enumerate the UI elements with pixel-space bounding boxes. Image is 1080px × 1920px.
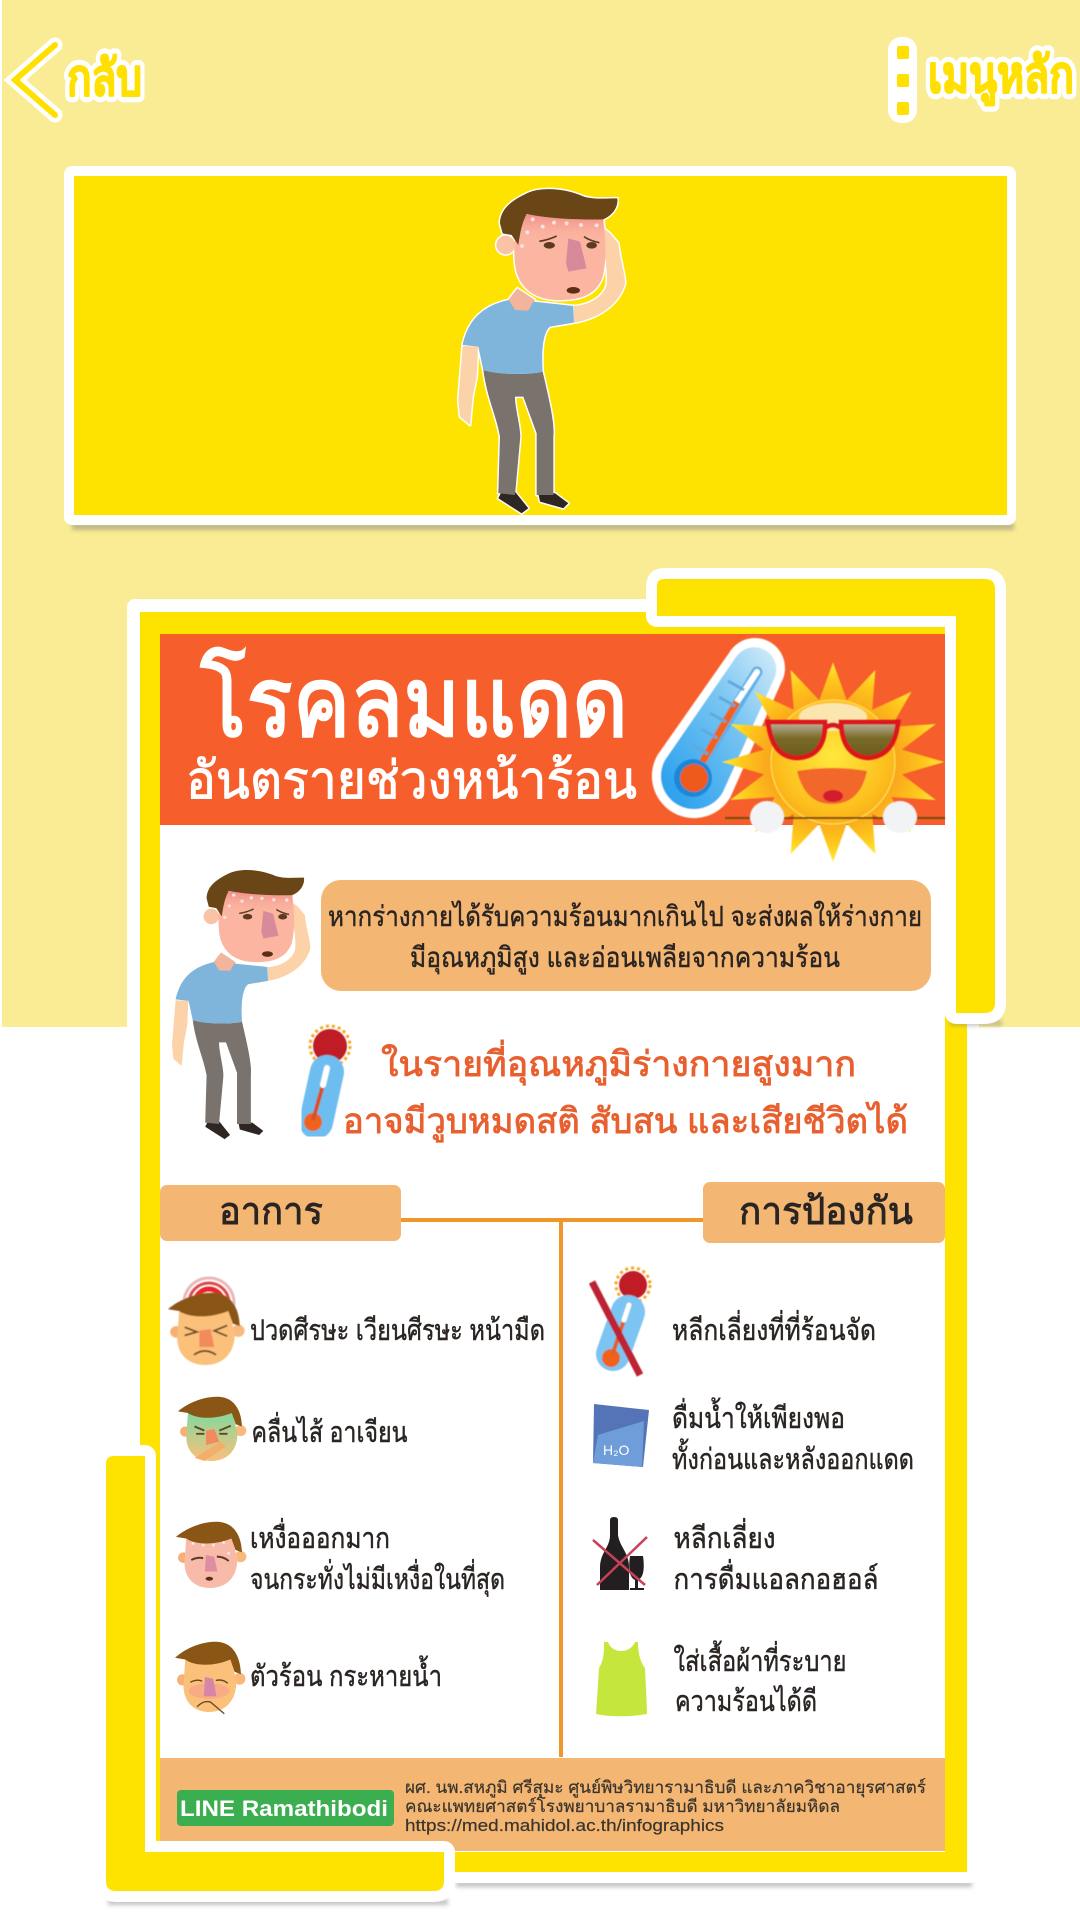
prevention text line 2: การดื่มแอลกอฮอล์ (674, 1559, 878, 1596)
warning line 2: อาจมีวูบหมดสติ สับสน และเสียชีวิตได้ (343, 1101, 908, 1142)
icon: sweating man (458, 189, 625, 513)
callout text line 2: มีอุณหภูมิสูง และอ่อนเพลียจากความร้อน (410, 942, 840, 975)
icon: tank top (596, 1642, 647, 1716)
prevention text: หลีกเลี่ยงที่ที่ร้อนจัด (672, 1310, 876, 1347)
panel: top illustration (64, 166, 1016, 525)
intro man illustration (172, 870, 310, 1139)
icon: back chevron (15, 45, 55, 115)
symptom text: คลื่นไส้ อาเจียน (252, 1412, 408, 1449)
subtitle: อันตรายช่วงหน้าร้อน (186, 752, 637, 810)
source credits: ผศ. นพ.สหภูมิ ศรีสุมะ ศูนย์พิษวิทยารามาธิบดี และภาควิชาอายุรศาสตร์ (405, 1778, 926, 1798)
icon: menu dots (888, 37, 917, 123)
icon: sun with sunglasses (722, 662, 945, 862)
warning text (343, 1040, 908, 1142)
footer band (160, 1758, 945, 1851)
page background (2, 0, 1080, 1027)
prevention 3: avoid alcohol (593, 1517, 878, 1596)
connector lines between the two columns (401, 1220, 703, 1757)
main menu button (888, 37, 1074, 123)
prevention 1: avoid heat (592, 1268, 876, 1375)
prevention 4: light clothing (596, 1640, 846, 1718)
title: โรคลมแดด (200, 647, 628, 757)
icon: crossed-out bottle and glass (593, 1517, 647, 1590)
prevention text line 2: ความร้อนได้ดี (675, 1684, 817, 1718)
symptom text line 2: จนกระทั่งไม่มีเหงื่อในที่สุด (250, 1559, 505, 1597)
prevention 2: drink water (593, 1397, 914, 1476)
symptom text: ปวดศีรษะ เวียนศีรษะ หน้ามืด (250, 1315, 545, 1347)
source credits (405, 1778, 926, 1835)
heading: symptoms (160, 1185, 401, 1241)
icon: headache face (168, 1278, 245, 1365)
heading: symptoms: อาการ (219, 1191, 323, 1233)
corner bracket: top right (657, 579, 995, 1013)
prevention text line 1: ดื่มน้ำให้เพียงพอ (672, 1397, 845, 1435)
symptom 1: headache (168, 1278, 545, 1365)
LINE badge: LINE Ramathibodi (180, 1796, 388, 1821)
symptom 3: sweating (176, 1518, 505, 1597)
heading: prevention: การป้องกัน (739, 1191, 913, 1233)
icon: glass of water (593, 1404, 649, 1467)
icon: sweating face (176, 1522, 246, 1588)
symptom 4: fever (175, 1642, 442, 1714)
warning line 1: ในรายที่อุณหภูมิร่างกายสูงมาก (381, 1040, 856, 1085)
back button (15, 45, 142, 115)
label: back: กลับ (67, 50, 142, 106)
symptom text line 1: เหงื่อออกมาก (250, 1518, 390, 1555)
icon: small thermometer with sun (304, 1026, 350, 1131)
symptom text: ตัวร้อน กระหายน้ำ (250, 1655, 442, 1693)
icon: nauseous face (178, 1397, 246, 1461)
prevention text line 1: ใส่เสื้อผ้าที่ระบาย (674, 1640, 846, 1678)
heading: prevention (703, 1182, 945, 1243)
panel: infographic frame (127, 599, 979, 1883)
icon: crossed-out thermometer (592, 1268, 650, 1375)
prevention text line 2: ทั้งก่อนและหลังออกแดด (672, 1438, 914, 1476)
source credits: https://med.mahidol.ac.th/infographics (405, 1816, 724, 1835)
intro callout (321, 880, 931, 991)
callout text line 1: หากร่างกายได้รับความร้อนมากเกินไป จะส่งผลให้ร่างกาย (328, 900, 922, 932)
source credits: คณะแพทยศาสตร์โรงพยาบาลรามาธิบดี มหาวิทยาลัยมหิดล (405, 1796, 840, 1816)
label: back: กลับ (67, 50, 142, 106)
icon: feverish face (175, 1642, 245, 1714)
header banner (160, 634, 945, 862)
corner bracket: bottom left (106, 1456, 444, 1891)
icon: big thermometer (652, 638, 785, 818)
symptom 2: nausea (178, 1397, 408, 1461)
icon: glass of water: H₂O (603, 1442, 630, 1458)
LINE badge (177, 1790, 394, 1826)
prevention text line 1: หลีกเลี่ยง (674, 1518, 776, 1555)
